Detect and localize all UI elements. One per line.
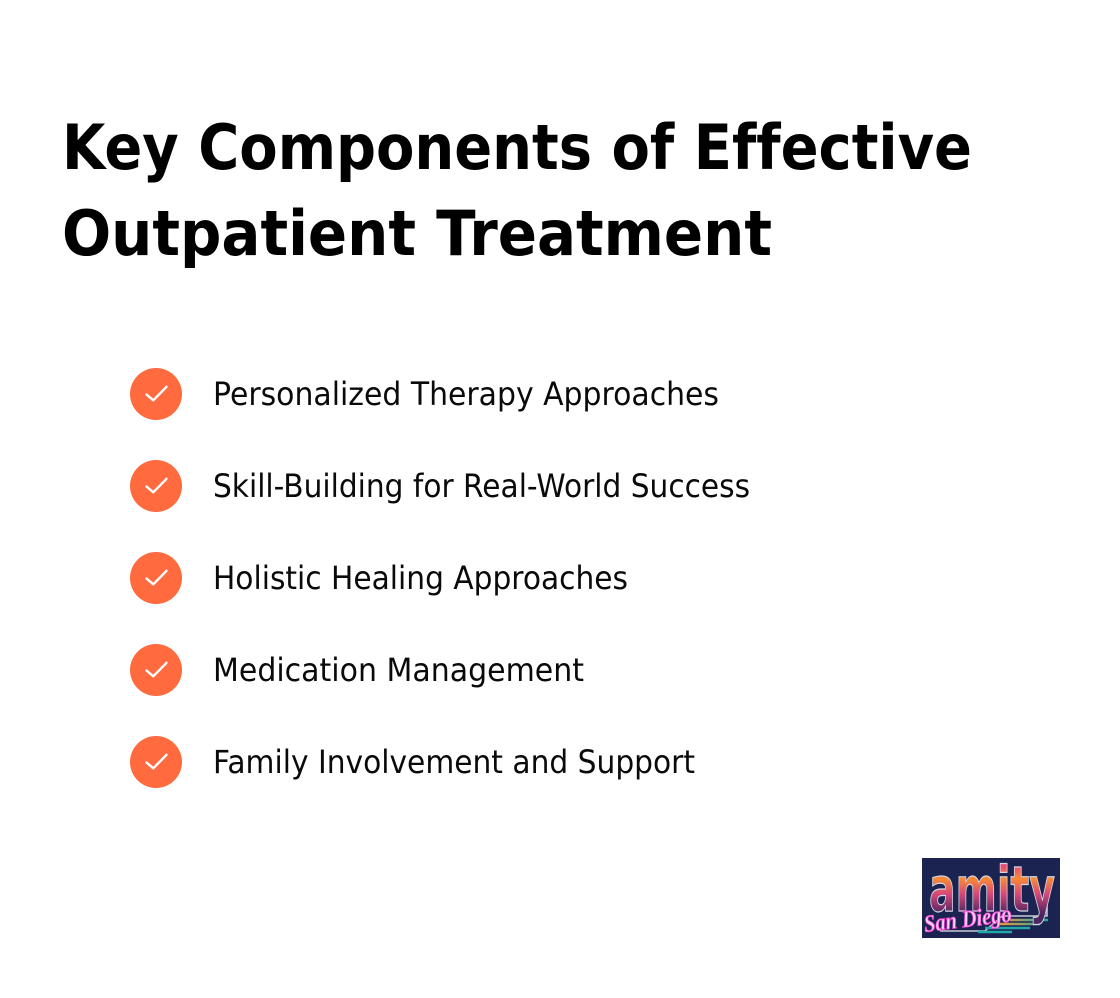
item: Holistic Healing Approaches [130,552,628,604]
logo: Amity San Diego [922,853,1060,938]
checklist [130,368,750,788]
item: Holistic Healing Approaches: Holistic Healing Approaches [213,559,628,597]
item: Skill-Building for Real-World Success: Skill-Building for Real-World Success [213,467,750,505]
item: Family Involvement and Support [130,736,695,788]
item: Personalized Therapy Approaches: Personalized Therapy Approaches [213,375,719,413]
item: Medication Management [130,644,584,696]
item: Skill-Building for Real-World Success [130,460,750,512]
item: Medication Management: Medication Management [213,651,584,689]
title: Key Components of Effective [62,111,972,184]
title [62,111,972,270]
logo: Amity San Diego: San Diego [923,901,1013,938]
title: Outpatient Treatment [62,197,772,270]
item: Personalized Therapy Approaches [130,368,719,420]
item: Family Involvement and Support: Family Involvement and Support [213,743,695,781]
